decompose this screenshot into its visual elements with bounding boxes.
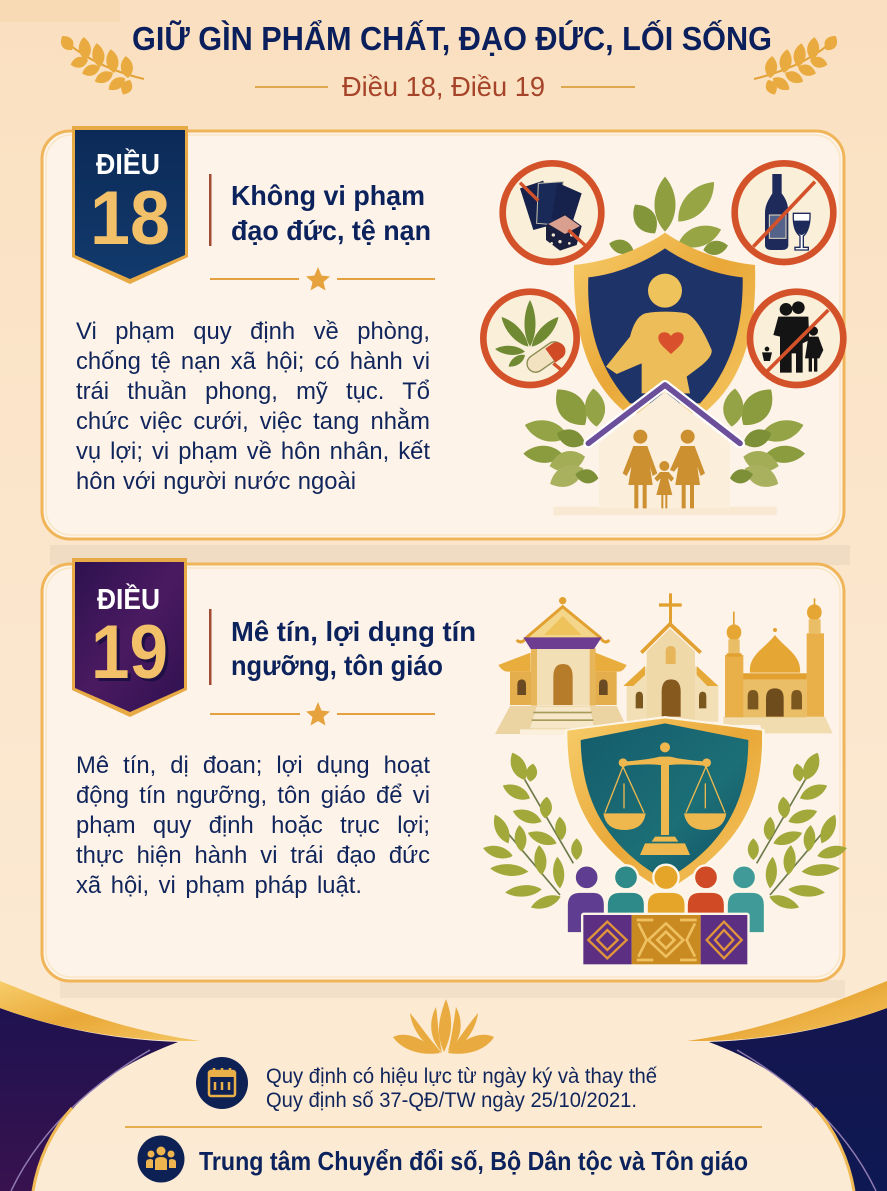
effective date note: Quy định số 37-QĐ/TW ngày 25/10/2021. — [266, 1089, 637, 1112]
no alcohol sign — [735, 163, 833, 262]
top leaves — [607, 175, 729, 257]
heading 18: Không vi phạm — [231, 180, 425, 211]
heading 19 — [231, 616, 476, 681]
illustration: protection shield and family — [483, 163, 843, 515]
body text Điều 19: động tín ngưỡng, tôn giáo để vi — [76, 782, 430, 809]
church — [623, 593, 718, 722]
body text Điều 19: Mê tín, dị đoan; lợi dụng hoạt — [76, 752, 430, 779]
footer curtain left — [0, 981, 200, 1191]
five community figures — [567, 865, 765, 933]
title: GIỮ GÌN PHẨM CHẤT, ĐẠO ĐỨC, LỐI SỐNG — [132, 19, 772, 57]
organisation name: Trung tâm Chuyển đổi số, Bộ Dân tộc và Tôn giáo — [199, 1146, 748, 1176]
laurel left — [57, 33, 144, 97]
laurel right — [754, 33, 841, 97]
effective date note — [266, 1065, 657, 1112]
lower leaves left — [522, 382, 607, 493]
body text Điều 18: Vi phạm quy định về phòng, — [76, 318, 430, 345]
body text Điều 19: thực hiện hành vi trái đạo đức — [76, 842, 430, 869]
no domestic violence sign — [750, 292, 843, 385]
laurel left branches — [482, 750, 582, 913]
ribbon 19: 19 — [91, 610, 168, 695]
ribbon 19: 19 — [94, 613, 171, 698]
laurel right branches — [748, 750, 848, 913]
ribbon 18: 18 — [90, 176, 170, 261]
heading bar 18 — [209, 174, 212, 246]
body text Điều 18: vụ lợi; vi phạm về hôn nhân, kết — [76, 438, 430, 465]
illustration: religious buildings, scales, communities — [482, 593, 848, 967]
no drugs sign — [483, 292, 577, 385]
lotus ornament — [393, 999, 494, 1054]
star divider 19 — [210, 702, 435, 726]
house with family — [553, 385, 777, 515]
ribbon 19: ĐIỀU — [97, 582, 160, 616]
footer curtain right — [687, 981, 887, 1191]
body text Điều 18: chức việc cưới, việc tang nhằm — [76, 408, 430, 435]
ribbon 18 — [72, 126, 188, 284]
body text Điều 18: hôn với người nước ngoài — [76, 468, 356, 495]
body text Điều 18: trái thuần phong, mỹ tục. Tổ — [76, 378, 430, 405]
heading 18 — [231, 180, 431, 246]
panel: Điều 19 — [42, 558, 848, 981]
ribbon 18: ĐIỀU — [96, 147, 160, 181]
effective date note: Quy định có hiệu lực từ ngày ký và thay thế — [266, 1065, 657, 1088]
body text Điều 19: xã hội, vi phạm pháp luật. — [76, 872, 362, 899]
ribbon 19 — [72, 558, 187, 717]
brocade pattern panels — [581, 913, 750, 967]
shield — [574, 233, 755, 413]
icon: calendar — [196, 1057, 248, 1109]
body text Điều 19: phạm quy định hoặc trục lợi; — [76, 812, 430, 839]
panel: Điều 18 — [42, 126, 844, 539]
heading 19: ngưỡng, tôn giáo — [231, 650, 443, 681]
temple — [495, 597, 630, 735]
card 18 background — [42, 131, 844, 539]
body text Điều 18: chống tệ nạn xã hội; có hành vi — [76, 348, 430, 375]
mosque — [723, 598, 833, 733]
body text Điều 18 — [76, 318, 430, 495]
subtitle: Điều 18, Điều 19 — [342, 71, 545, 102]
heading bar 19 — [209, 609, 212, 685]
no gambling sign — [503, 163, 601, 262]
heading 18: đạo đức, tệ nạn — [231, 215, 431, 246]
body text Điều 19 — [76, 752, 430, 899]
heading 19: Mê tín, lợi dụng tín — [231, 616, 476, 647]
teal shield with scales — [565, 716, 765, 895]
person with heart — [606, 274, 712, 393]
icon: people — [138, 1136, 184, 1182]
lower leaves right — [722, 382, 806, 493]
star divider 18 — [210, 267, 435, 290]
card 19 background — [42, 564, 844, 981]
